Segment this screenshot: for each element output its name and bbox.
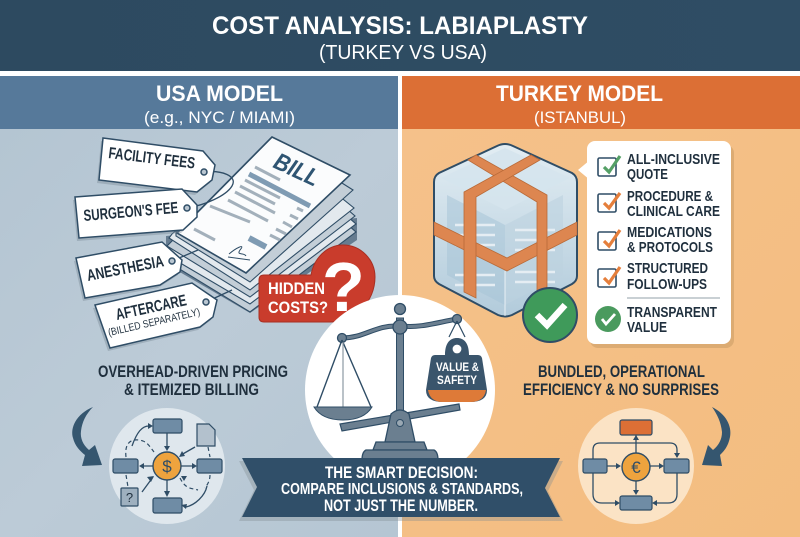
tag: aftercare	[93, 283, 217, 351]
item: all-inclusive quote: ALL-INCLUSIVE	[627, 151, 720, 168]
text: overhead pricing	[98, 363, 288, 399]
bill top sheet: BILL	[269, 148, 323, 192]
tag: surgeon's fee	[73, 189, 197, 241]
icon: balance scale	[314, 304, 487, 460]
item: all-inclusive quote	[598, 151, 720, 183]
callout: hidden costs: HIDDEN	[268, 279, 325, 298]
tag: aftercare: AFTERCARE	[114, 292, 188, 324]
item: medications and protocols: MEDICATIONS	[627, 224, 712, 241]
tag: facility fees	[97, 138, 215, 195]
panel: USA model	[0, 76, 398, 537]
title banner: (TURKEY VS USA)	[319, 42, 487, 64]
text: overhead pricing: & ITEMIZED BILLING	[124, 381, 259, 399]
text: bundled efficiency	[523, 363, 719, 399]
weight: value and safety: VALUE &	[436, 362, 479, 374]
tag: facility fees: FACILITY FEES	[108, 145, 196, 173]
weight: value and safety: SAFETY	[437, 375, 477, 387]
item: medications and protocols	[598, 224, 713, 256]
banner: the smart decision: THE SMART DECISION:	[325, 464, 478, 482]
panel: Turkey model	[402, 76, 800, 537]
tilted plank	[340, 404, 460, 431]
tag strings	[172, 172, 233, 302]
diagram: bundled flow	[578, 408, 694, 524]
banner: the smart decision: NOT JUST THE NUMBER.	[324, 497, 478, 515]
weight: value and safety	[426, 321, 487, 402]
item: transparent value: VALUE	[627, 319, 667, 336]
icon: dollar coin: $	[162, 457, 172, 476]
USA header	[0, 76, 398, 129]
Turkey header: TURKEY MODEL	[496, 81, 663, 106]
tag: surgeon's fee: SURGEON'S FEE	[83, 200, 179, 225]
scale circle	[305, 295, 495, 485]
icon: green check badge	[523, 288, 577, 342]
tag: aftercare: (BILLED SEPARATELY)	[107, 306, 201, 339]
icon: wrapped bundle cube	[434, 144, 577, 316]
banner: the smart decision	[242, 458, 560, 517]
item: medications and protocols: & PROTOCOLS	[627, 239, 713, 256]
item: structured follow-ups: STRUCTURED	[627, 260, 708, 277]
title banner: COST ANALYSIS: LABIAPLASTY	[212, 12, 588, 40]
item: structured follow-ups	[598, 260, 708, 293]
text: overhead pricing: OVERHEAD-DRIVEN PRICING	[98, 363, 288, 381]
tag: anesthesia	[74, 242, 182, 301]
arrow: Turkey curved	[702, 407, 730, 466]
item: all-inclusive quote: QUOTE	[627, 166, 668, 183]
callout: hidden costs: COSTS?	[268, 298, 328, 317]
banner: the smart decision: COMPARE INCLUSIONS & STANDARDS,	[281, 481, 523, 498]
USA header: (e.g., NYC / MIAMI)	[144, 108, 295, 127]
diagram: itemized billing flow: ?	[126, 490, 133, 505]
item: procedure and clinical care: PROCEDURE &	[627, 188, 713, 205]
bill top sheet	[177, 137, 350, 273]
left pan	[314, 340, 372, 420]
title banner	[0, 0, 800, 71]
item: structured follow-ups: FOLLOW-UPS	[627, 276, 707, 293]
orange straps	[434, 155, 577, 298]
item: procedure and clinical care	[598, 188, 720, 220]
callout: hidden costs	[259, 245, 375, 326]
tag: anesthesia: ANESTHESIA	[86, 253, 166, 285]
text: bundled efficiency: BUNDLED, OPERATIONAL	[538, 363, 705, 381]
signature	[228, 247, 250, 260]
USA header: USA MODEL	[156, 81, 283, 106]
text: bundled efficiency: EFFICIENCY & NO SURPRISES	[523, 381, 719, 399]
banner shadow	[239, 461, 563, 521]
item: transparent value	[595, 304, 717, 336]
arrow: USA curved	[72, 407, 102, 466]
item: transparent value: TRANSPARENT	[627, 304, 717, 321]
Turkey header	[402, 76, 800, 129]
callout: hidden costs: ?	[322, 248, 365, 326]
callout: inclusions checklist	[578, 141, 734, 348]
item: procedure and clinical care: CLINICAL CARE	[627, 203, 720, 220]
icon: euro coin: €	[631, 458, 641, 477]
pivot base	[385, 410, 415, 442]
diagram: itemized billing flow	[109, 408, 225, 524]
Turkey header: (ISTANBUL)	[534, 108, 626, 127]
icon: stack of bills	[165, 137, 357, 313]
